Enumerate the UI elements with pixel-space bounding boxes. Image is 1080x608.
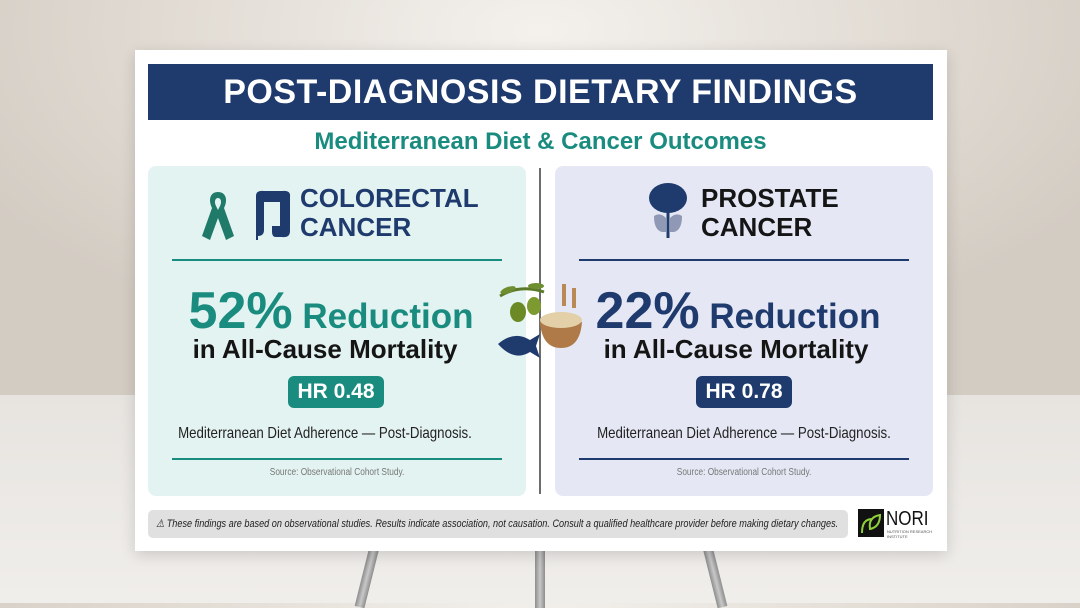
panel: prostate: Source: Observational Cohort Study.	[677, 467, 811, 478]
title bar	[148, 64, 933, 120]
heading	[300, 183, 479, 242]
logo: NORI: INSTITUTE	[887, 534, 908, 539]
stat: 52% Reduction	[189, 282, 473, 340]
heading: CANCER	[701, 212, 812, 242]
heading: COLORECTAL	[300, 183, 479, 213]
HR badge	[288, 376, 384, 408]
logo: NORI: NORI	[886, 508, 928, 530]
panel: prostate: Mediterranean Diet Adherence — Post-Diagnosis.	[597, 425, 891, 442]
heading: PROSTATE	[701, 183, 839, 213]
HR badge: HR 0.78	[705, 380, 783, 403]
icon: ribbon	[202, 192, 234, 240]
logo: NORI: NUTRITION RESEARCH	[887, 529, 932, 534]
panel: colorectal: in All-Cause Mortality	[193, 334, 457, 364]
HR badge	[696, 376, 792, 408]
panel: prostate	[555, 166, 933, 496]
subtitle: Mediterranean Diet & Cancer Outcomes	[314, 128, 767, 155]
panel: colorectal	[148, 166, 526, 496]
icon: colon	[256, 190, 290, 240]
stat: 22% Reduction	[596, 282, 880, 340]
title bar: POST-DIAGNOSIS DIETARY FINDINGS	[223, 73, 858, 111]
icon: food cluster	[498, 283, 582, 358]
footer disclaimer: ⚠ These findings are based on observational studies. Results indicate association, not causation. Consult a qualified healthcare provider before making dietary changes.	[156, 518, 838, 530]
panel: colorectal: Source: Observational Cohort Study.	[270, 467, 404, 478]
footer disclaimer	[148, 510, 848, 538]
HR badge: HR 0.48	[297, 380, 375, 403]
heading: CANCER	[300, 212, 411, 242]
heading	[701, 183, 839, 242]
logo: NORI	[858, 508, 932, 539]
icon: prostate	[649, 183, 687, 238]
divider	[539, 168, 541, 494]
panel: colorectal: Mediterranean Diet Adherence — Post-Diagnosis.	[178, 425, 472, 442]
board	[135, 50, 947, 551]
panel: prostate: in All-Cause Mortality	[604, 334, 868, 364]
